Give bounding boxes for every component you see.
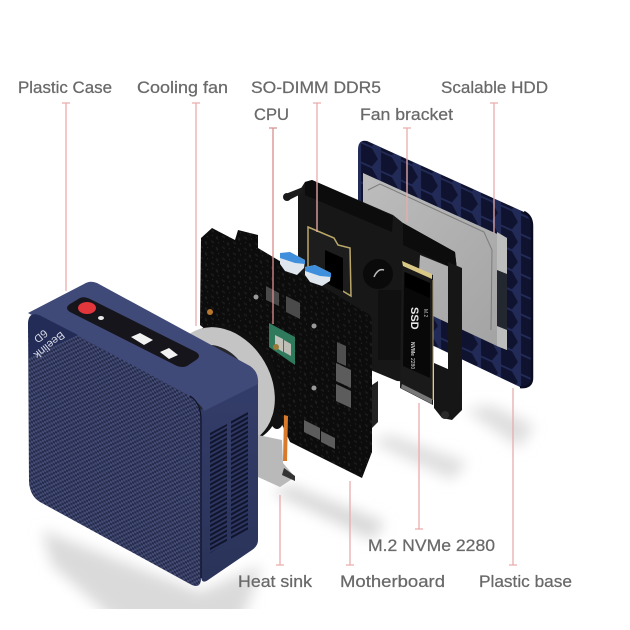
port panel <box>67 297 199 367</box>
exploded view infographic <box>19 80 572 609</box>
side face with vents <box>200 382 258 582</box>
callout: Plastic Case: Plastic Case <box>18 78 112 97</box>
callout: Plastic base: Plastic base <box>479 572 572 591</box>
callout: Motherboard: Motherboard <box>340 572 445 591</box>
SO-DIMM memory <box>308 227 351 296</box>
callout: Cooling fan: Cooling fan <box>137 78 228 97</box>
see-through gap beside SSD <box>433 347 448 369</box>
USB slots <box>131 333 153 345</box>
M.2 SSD <box>400 261 433 405</box>
callout: Plastic base <box>479 388 572 591</box>
callout: Fan bracket <box>360 105 453 222</box>
M.2 SSD: 2280 <box>409 358 415 369</box>
floor shadows <box>42 405 534 625</box>
front mesh face <box>28 314 201 586</box>
callout: CPU: CPU <box>254 105 289 124</box>
fan bracket <box>283 180 462 420</box>
callout: Motherboard <box>340 481 445 591</box>
logo corner <box>28 314 78 361</box>
callout: Scalable HDD <box>441 78 548 233</box>
Beelink mini PC case <box>28 282 258 586</box>
pin header <box>372 381 378 428</box>
cooling fan ring <box>150 306 302 464</box>
callout: Plastic Case <box>18 78 112 291</box>
motherboard <box>200 228 378 478</box>
callout: Cooling fan <box>137 78 228 326</box>
callout: M.2 NVMe 2280: M.2 NVMe 2280 <box>368 536 495 555</box>
top face <box>28 282 258 411</box>
callout: SO-DIMM DDR5 <box>251 78 381 232</box>
callout: M.2 NVMe 2280 <box>368 403 495 555</box>
M.2 SSD: NVMe <box>409 342 415 356</box>
bracket post <box>434 262 462 420</box>
callout: SO-DIMM DDR5: SO-DIMM DDR5 <box>251 78 381 97</box>
blower fan <box>363 259 402 360</box>
callout: CPU <box>254 105 289 324</box>
callout: Scalable HDD: Scalable HDD <box>441 78 548 97</box>
M.2 SSD: M.2 <box>422 309 428 318</box>
CPU <box>269 323 295 365</box>
scalable HDD <box>363 173 507 350</box>
callout: Heat sink <box>238 495 313 591</box>
heat sink <box>258 413 295 487</box>
M.2 SSD: SSD <box>408 307 420 330</box>
logo corner: Beelink <box>31 329 67 361</box>
logo corner: 6D <box>31 327 50 345</box>
USB ports <box>280 252 331 286</box>
callout: Fan bracket: Fan bracket <box>360 105 453 124</box>
chips <box>207 286 351 449</box>
callout: Heat sink: Heat sink <box>238 572 313 591</box>
power button <box>78 302 96 314</box>
plastic base <box>358 141 532 387</box>
